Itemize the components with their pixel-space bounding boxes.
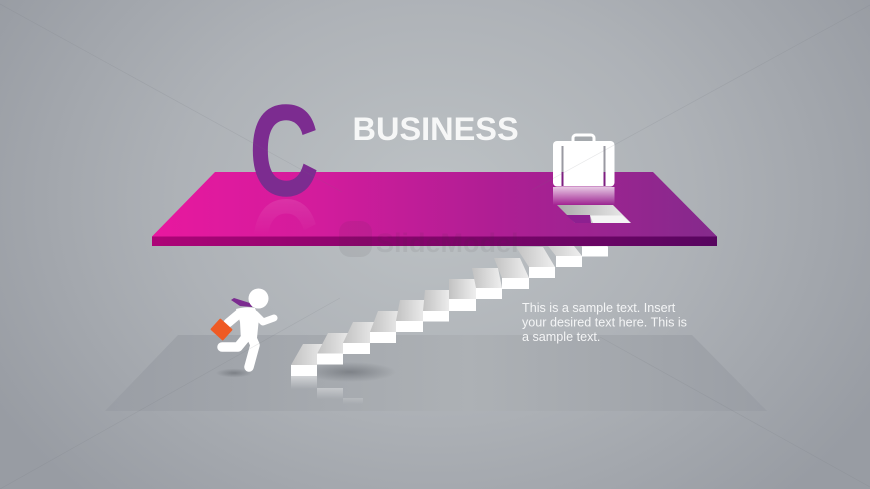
watermark [339,221,519,258]
staircase [291,226,608,376]
opening in platform [557,205,631,223]
shadow: stairs [304,362,396,382]
panel: floor plane [105,335,767,411]
panel: magenta platform [152,172,717,246]
briefcase reflection [553,187,614,205]
icon: briefcase [553,135,614,186]
platform top surface [152,172,717,236]
runner head [248,288,268,308]
runner torso [236,307,259,341]
body text: a sample text. [522,330,600,344]
body text: your desired text here. This is [522,316,687,330]
runner limbs [222,313,274,367]
icon: running businessman [210,288,274,367]
body text: This is a sample text. Insert [522,301,676,315]
orange case [210,318,233,341]
staircase reflection [291,376,363,404]
heading: BUSINESS: BUSINESS [352,111,519,147]
platform front edge [152,236,717,246]
runner tie [231,298,253,307]
watermark: SlideModel [376,228,519,258]
letter reflection: C [250,173,318,316]
letter C: C [250,79,318,222]
shadow: runner [216,368,252,378]
